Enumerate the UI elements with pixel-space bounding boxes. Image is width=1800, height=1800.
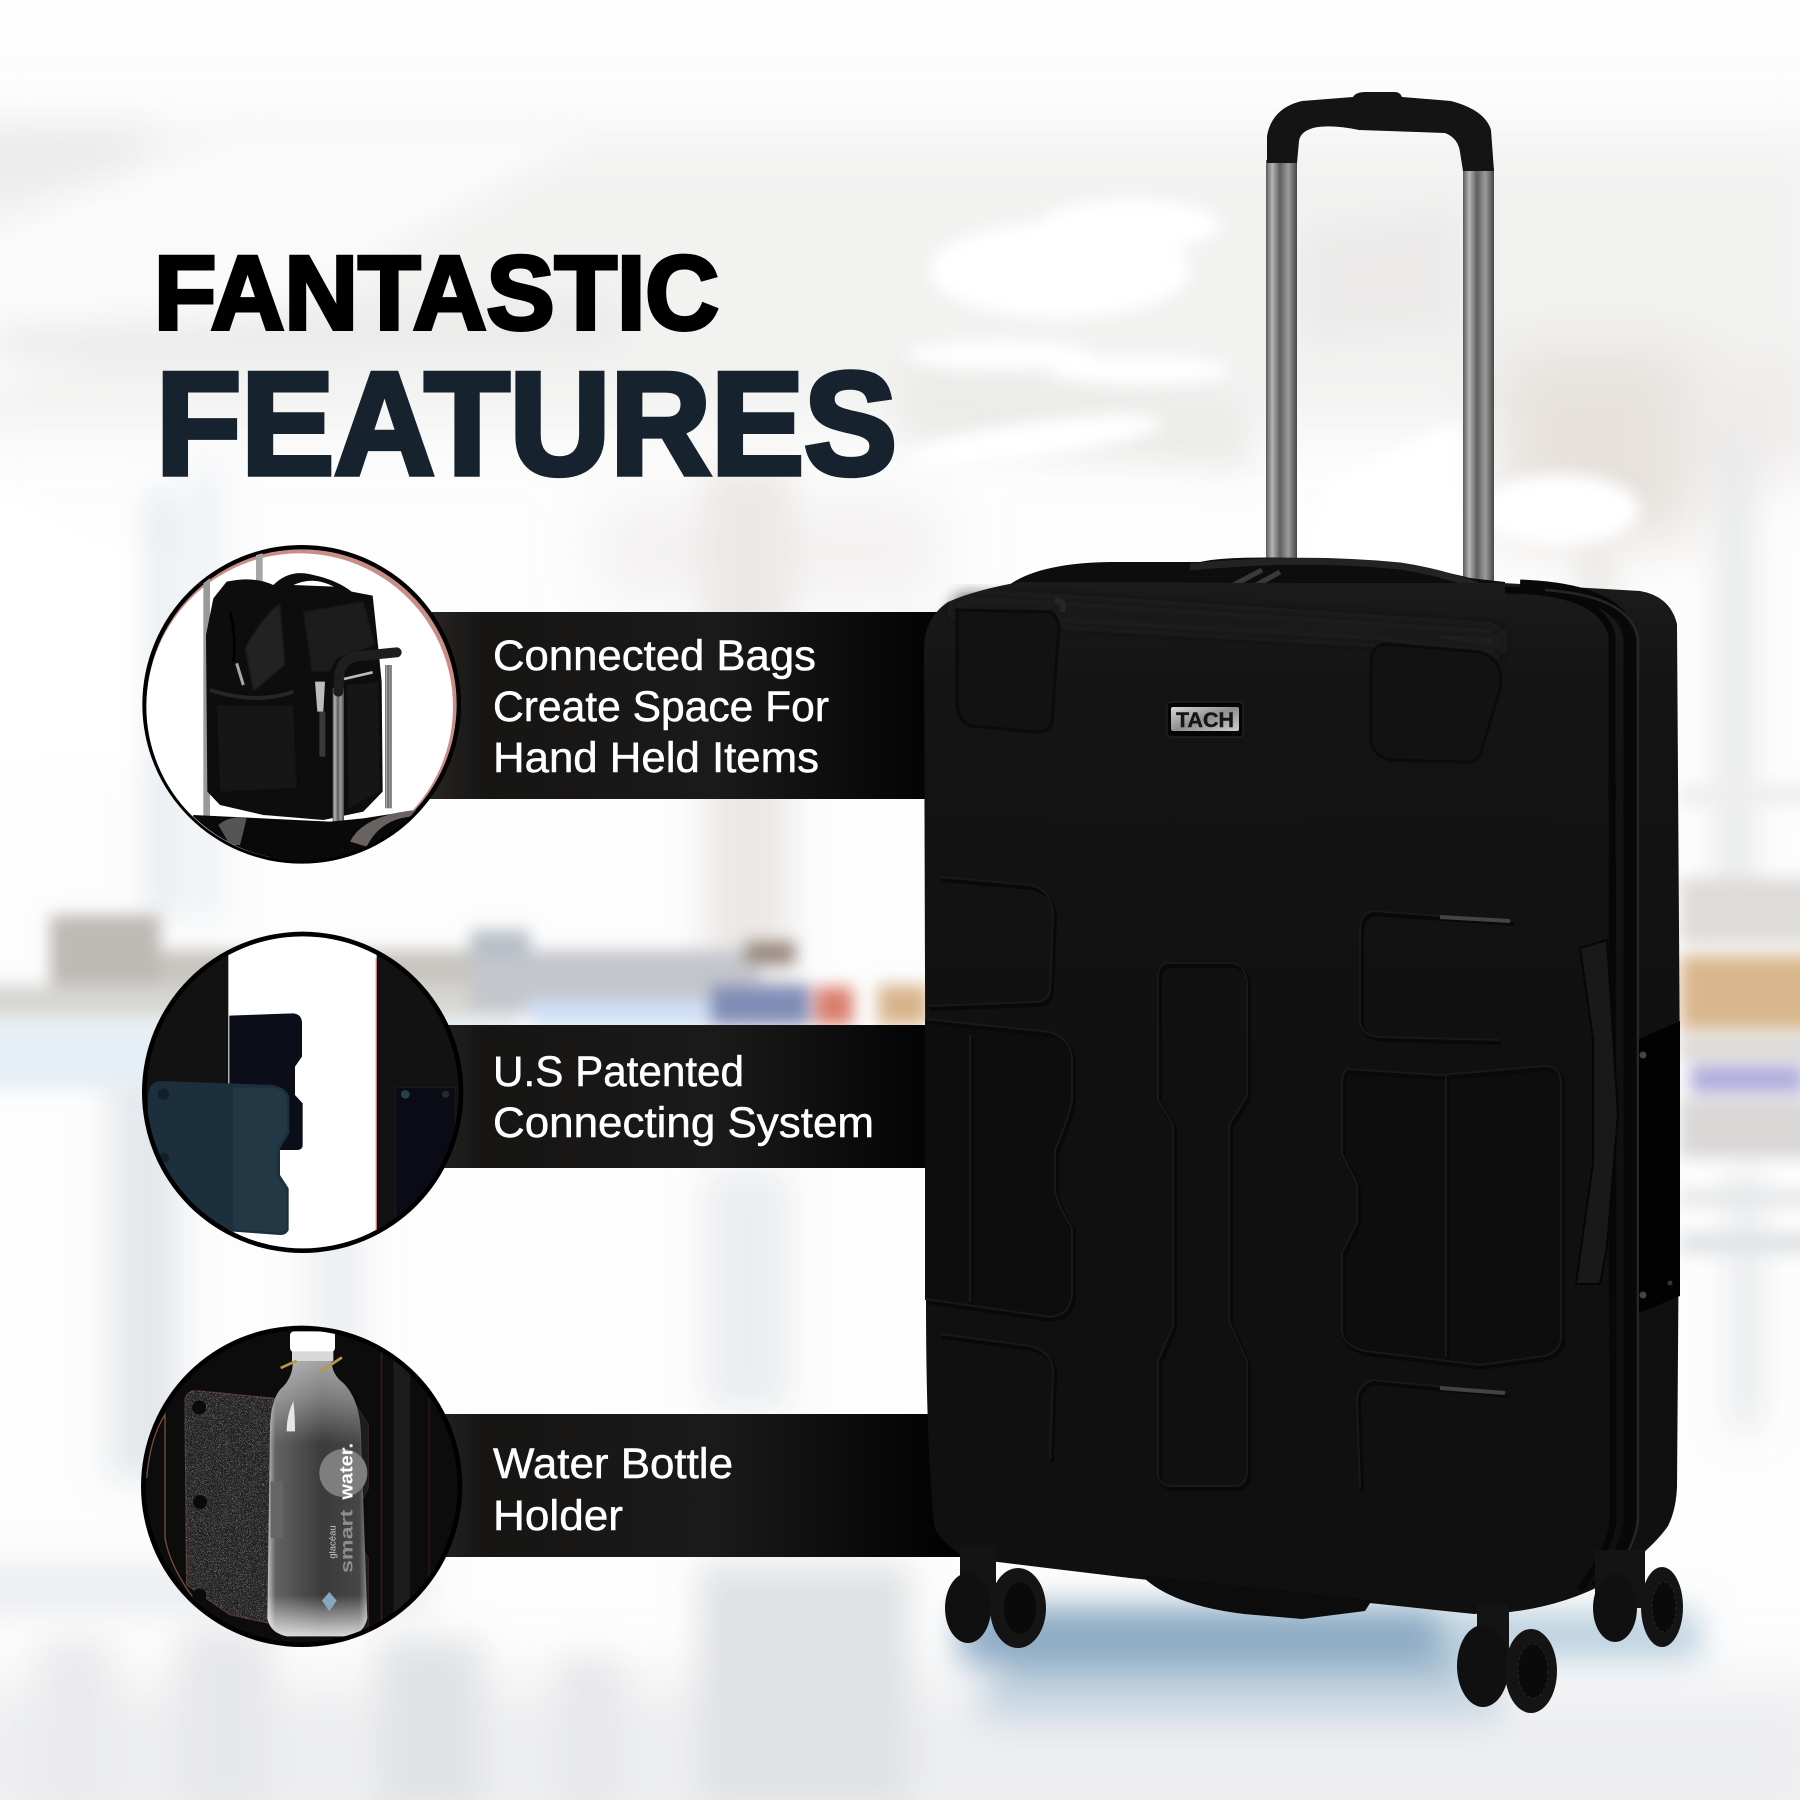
TACH badge: TACH — [1176, 709, 1234, 732]
suitcase — [924, 92, 1683, 1713]
trolley handle — [385, 665, 392, 808]
top shell shading — [950, 596, 1501, 762]
rear right wheels — [1593, 1550, 1683, 1647]
banner text: Hand Held Items — [493, 734, 819, 782]
banner text — [493, 632, 829, 782]
suitcase below — [193, 810, 415, 860]
side handle — [1576, 940, 1618, 1284]
water bottle — [267, 1331, 367, 1636]
front left wheels — [945, 1545, 1046, 1648]
front right wheels — [1457, 1605, 1557, 1713]
water bottle: glacéau — [327, 1525, 337, 1559]
right plate — [396, 1087, 455, 1218]
telescopic handle tubes — [1266, 160, 1494, 590]
banner text: Connecting System — [493, 1099, 874, 1147]
water bottle: smart — [337, 1510, 357, 1573]
water bottle: water. — [336, 1443, 357, 1501]
banner text: Connected Bags — [493, 632, 816, 680]
teal front plate — [148, 1081, 290, 1235]
navy rear plate — [229, 1013, 303, 1150]
side connecting plate — [1639, 1021, 1680, 1313]
banner: connecting system — [420, 1025, 960, 1168]
TACH badge — [1167, 702, 1243, 737]
banner text: Water Bottle — [493, 1440, 733, 1488]
circle photo: connecting system plates — [140, 932, 467, 1255]
heading line: FANTASTIC: FANTASTIC — [154, 235, 719, 352]
banner text — [493, 1048, 874, 1147]
heading line: FEATURES: FEATURES — [156, 342, 897, 505]
embossed panels — [925, 877, 1563, 1491]
zipper seam and side wall — [1505, 586, 1638, 1590]
banner text: U.S Patented — [493, 1048, 744, 1096]
bottle holder plate — [185, 1391, 277, 1625]
case body — [924, 582, 1680, 1614]
banner text — [493, 1440, 733, 1540]
banner: water bottle holder — [420, 1414, 960, 1557]
underside stand — [1141, 1575, 1372, 1619]
circle photo: backpack on trolley — [142, 545, 461, 868]
title: FANTASTIC FEATURES — [154, 235, 897, 505]
carry handle and zips — [1009, 558, 1505, 604]
telescopic handle grip — [1267, 92, 1494, 171]
banner: connected bags — [420, 612, 960, 799]
circle photo: water bottle holder — [140, 1325, 467, 1648]
backpack — [206, 573, 383, 820]
banner text: Create Space For — [493, 683, 829, 731]
banner text: Holder — [493, 1492, 623, 1540]
